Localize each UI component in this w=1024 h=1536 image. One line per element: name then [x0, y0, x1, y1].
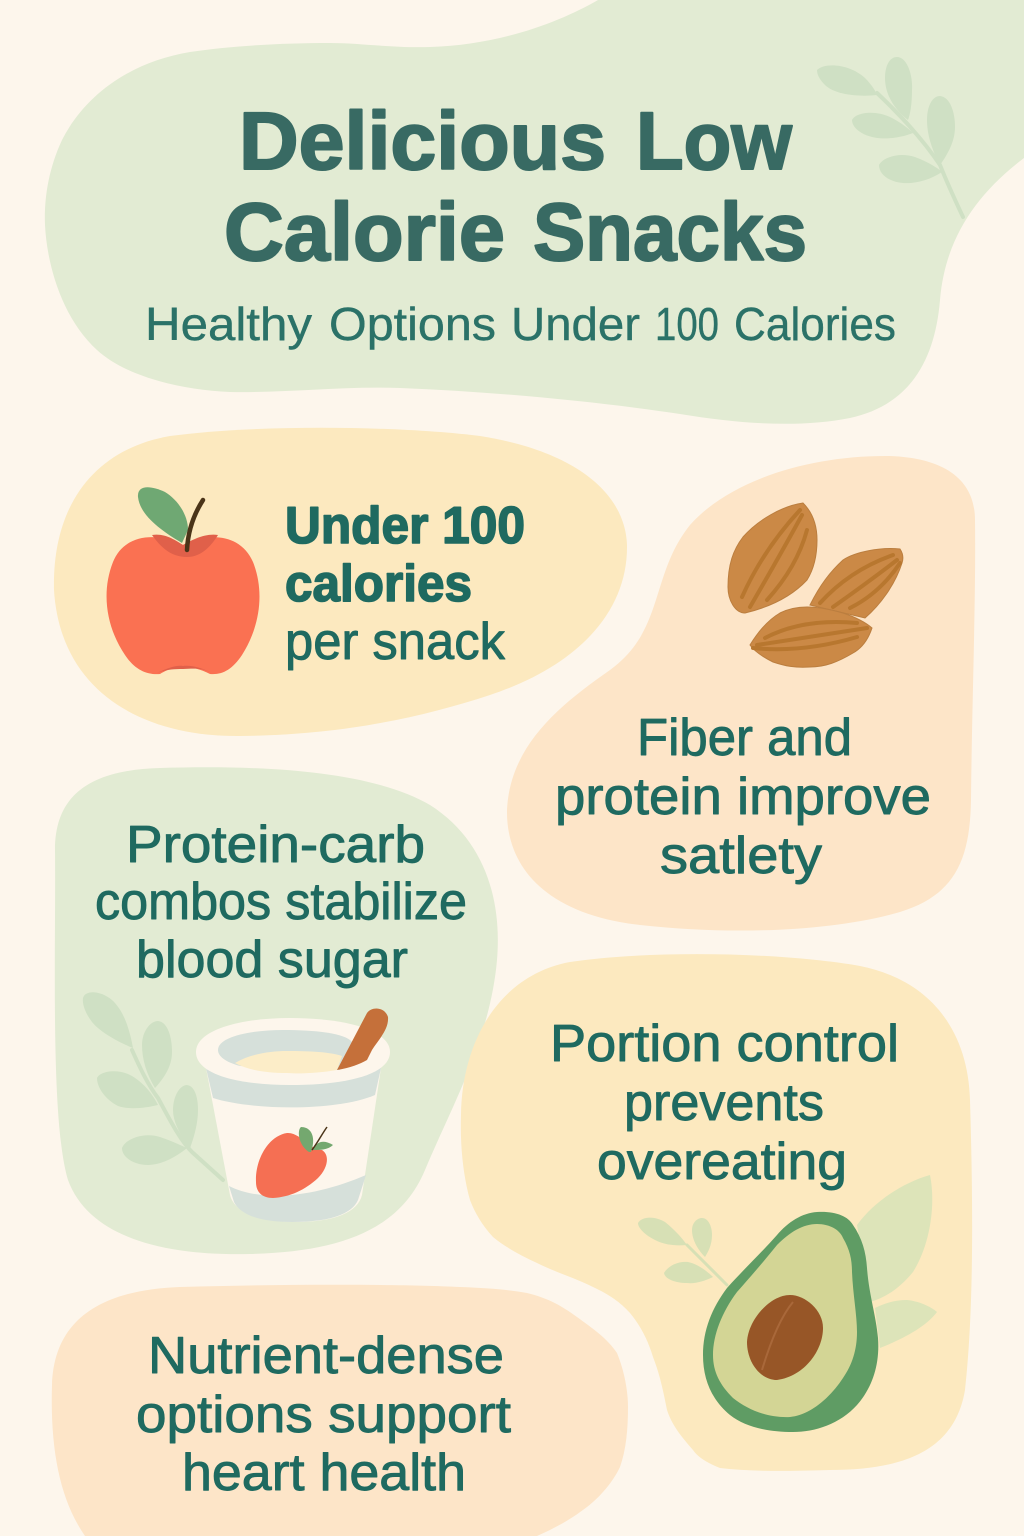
icon: spoon — [337, 1008, 388, 1070]
title — [224, 96, 807, 278]
text: under 100 calories: per snack — [285, 613, 506, 671]
subtitle: Healthy — [145, 298, 312, 350]
panel: under 100 calories — [54, 428, 627, 736]
title: Low — [636, 96, 792, 187]
icon: almonds — [728, 503, 903, 667]
subtitle: Calories — [734, 298, 896, 350]
text: nutrient-dense: heart health — [182, 1444, 466, 1502]
text: protein-carb combos: blood sugar — [136, 931, 408, 989]
icon: yogurt cup — [196, 1008, 390, 1222]
panel: nutrient-dense — [52, 1285, 628, 1536]
icon: leaf sprig left — [83, 992, 223, 1180]
text: portion control: prevents — [624, 1074, 824, 1132]
text: fiber and protein — [555, 709, 931, 885]
text: portion control — [550, 1015, 899, 1191]
icon: leaf sprig header — [817, 57, 963, 217]
text: nutrient-dense: options support — [136, 1386, 512, 1444]
text: under 100 calories — [285, 497, 525, 671]
icon: apple — [107, 487, 259, 674]
title: Delicious — [239, 96, 606, 187]
text: fiber and protein: satlety — [660, 827, 822, 885]
text: under 100 calories: Under 100 — [285, 497, 525, 555]
text: nutrient-dense — [136, 1327, 512, 1502]
subtitle: 100 — [655, 298, 719, 350]
panel: header — [45, 0, 1024, 424]
text: protein-carb combos: combos stabilize — [95, 873, 467, 931]
title: Snacks — [533, 187, 807, 278]
text: fiber and protein: protein improve — [555, 768, 931, 826]
text: portion control: Portion control — [550, 1015, 899, 1073]
panel: fiber and protein — [507, 456, 975, 931]
icon: apple label — [256, 1133, 327, 1198]
text: under 100 calories: calories — [285, 555, 472, 613]
title: Calorie — [224, 187, 505, 278]
panel: protein-carb combos — [55, 767, 498, 1254]
text: protein-carb combos — [95, 816, 467, 989]
subtitle — [145, 298, 896, 350]
panel: portion control — [461, 954, 972, 1471]
text: fiber and protein: Fiber and — [637, 709, 852, 767]
text: nutrient-dense: Nutrient-dense — [148, 1327, 504, 1385]
icon: avocado — [703, 1212, 878, 1432]
subtitle: Options — [329, 298, 496, 350]
subtitle: Under — [511, 298, 640, 350]
icon: background leaves — [638, 1175, 937, 1348]
text: protein-carb combos: Protein-carb — [126, 816, 425, 874]
text: portion control: overeating — [597, 1133, 847, 1191]
